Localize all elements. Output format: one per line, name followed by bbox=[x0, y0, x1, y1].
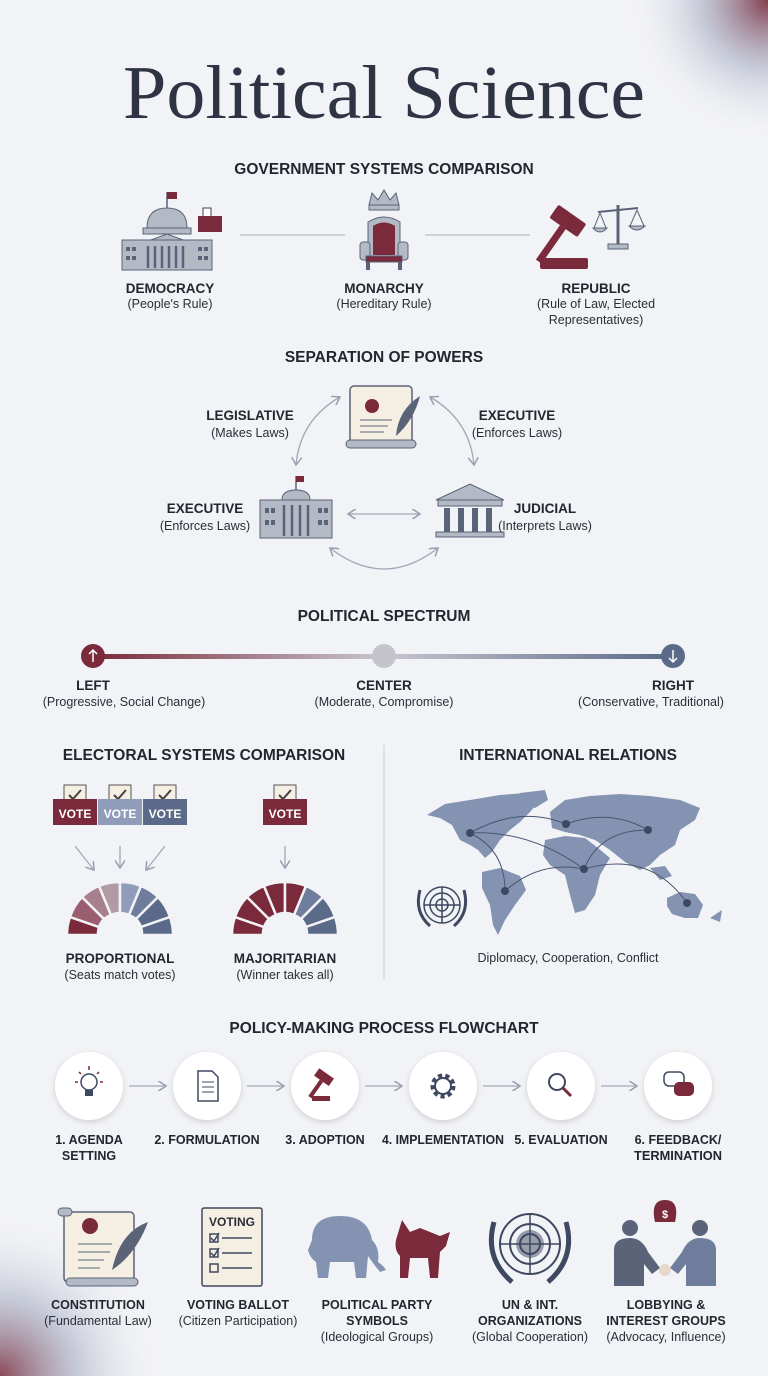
step 4: implementation: 4. IMPLEMENTATION bbox=[382, 1133, 504, 1147]
step 5: evaluation: 5. EVALUATION bbox=[514, 1133, 608, 1147]
step 4: implementation bbox=[382, 1052, 504, 1147]
icon: voting ballot bbox=[202, 1208, 262, 1286]
label: executive left bbox=[160, 501, 250, 533]
icon: scroll with quill bbox=[346, 386, 420, 448]
icon: vote boxes: VOTE bbox=[149, 807, 181, 821]
label: lobbying: INTEREST GROUPS bbox=[606, 1314, 726, 1328]
label: UN: ORGANIZATIONS bbox=[478, 1314, 582, 1328]
label: party symbols: (Ideological Groups) bbox=[321, 1330, 433, 1344]
heading: political spectrum: POLITICAL SPECTRUM bbox=[298, 608, 470, 625]
label: center bbox=[315, 678, 453, 709]
icon: republic gavel and scales bbox=[525, 205, 645, 272]
label: UN: (Global Cooperation) bbox=[472, 1330, 588, 1344]
step 1: agenda setting: 1. AGENDA bbox=[55, 1133, 123, 1147]
chart: spectrum line bbox=[81, 644, 685, 668]
label: executive top bbox=[472, 408, 562, 440]
label: executive top: EXECUTIVE bbox=[479, 408, 555, 423]
icon: party symbols bbox=[308, 1216, 450, 1278]
label: party symbols: SYMBOLS bbox=[346, 1314, 408, 1328]
chart: proportional hemicycle bbox=[67, 882, 173, 935]
label: constitution: CONSTITUTION bbox=[51, 1298, 145, 1312]
label: center: CENTER bbox=[356, 678, 412, 693]
label: UN bbox=[472, 1298, 588, 1344]
step 6: feedback bbox=[634, 1052, 722, 1163]
icon: UN emblem small bbox=[418, 887, 466, 926]
step 1: agenda setting bbox=[55, 1052, 123, 1163]
step 3: adoption: 3. ADOPTION bbox=[285, 1133, 365, 1147]
label: majoritarian bbox=[234, 951, 336, 982]
label: lobbying: (Advocacy, Influence) bbox=[606, 1330, 726, 1344]
label: democracy: DEMOCRACY bbox=[126, 281, 214, 296]
label: legislative: LEGISLATIVE bbox=[206, 408, 294, 423]
heading: electoral systems: ELECTORAL SYSTEMS COMPARISON bbox=[63, 747, 345, 764]
step 3: adoption bbox=[285, 1052, 365, 1147]
label: left bbox=[43, 678, 205, 709]
label: monarchy: (Hereditary Rule) bbox=[336, 297, 432, 311]
step 2: formulation bbox=[154, 1052, 260, 1147]
icon: lobbying handshake bbox=[614, 1200, 716, 1286]
label: republic: (Rule of Law, Elected bbox=[537, 297, 655, 311]
label: monarchy: MONARCHY bbox=[344, 281, 424, 296]
step 5: evaluation bbox=[514, 1052, 608, 1147]
step 1: agenda setting: SETTING bbox=[62, 1149, 116, 1163]
icon: lobbying handshake: $ bbox=[662, 1209, 668, 1221]
heading: international relations: INTERNATIONAL RELATIONS bbox=[459, 747, 677, 764]
icon: UN emblem bbox=[491, 1214, 569, 1282]
label: constitution: (Fundamental Law) bbox=[44, 1314, 152, 1328]
label: legislative bbox=[206, 408, 294, 440]
icon: voting ballot: VOTING bbox=[209, 1215, 255, 1229]
icon: judicial courthouse bbox=[436, 484, 504, 537]
heading: separation of powers: SEPARATION OF POWERS bbox=[285, 349, 483, 366]
icon: vote boxes bbox=[53, 785, 307, 870]
label: right: RIGHT bbox=[652, 678, 695, 693]
label: center: (Moderate, Compromise) bbox=[315, 695, 453, 709]
label: right bbox=[578, 678, 724, 709]
label: right: (Conservative, Traditional) bbox=[578, 695, 724, 709]
label: left: (Progressive, Social Change) bbox=[43, 695, 205, 709]
flowchart: arrows bbox=[129, 1085, 637, 1087]
heading: policy-making flowchart: POLICY-MAKING PROCESS FLOWCHART bbox=[229, 1020, 539, 1037]
label: proportional bbox=[64, 951, 176, 982]
label: left: LEFT bbox=[76, 678, 111, 693]
label: judicial bbox=[498, 501, 592, 533]
label: democracy: (People's Rule) bbox=[127, 297, 213, 311]
label: majoritarian: (Winner takes all) bbox=[236, 968, 334, 982]
label: lobbying: LOBBYING & bbox=[627, 1298, 705, 1312]
title: Political Science bbox=[123, 51, 645, 135]
label: constitution bbox=[44, 1298, 152, 1328]
label: proportional: PROPORTIONAL bbox=[66, 951, 174, 966]
label: executive left: (Enforces Laws) bbox=[160, 519, 250, 533]
label: international relations caption: Diplomacy, Cooperation, Conflict bbox=[477, 951, 659, 965]
label: party symbols: POLITICAL PARTY bbox=[322, 1298, 433, 1312]
label: republic bbox=[537, 281, 655, 327]
label: proportional: (Seats match votes) bbox=[64, 968, 176, 982]
label: judicial: JUDICIAL bbox=[514, 501, 576, 516]
label: executive top: (Enforces Laws) bbox=[472, 426, 562, 440]
step 6: feedback: TERMINATION bbox=[634, 1149, 722, 1163]
label: majoritarian: MAJORITARIAN bbox=[234, 951, 336, 966]
label: party symbols bbox=[321, 1298, 433, 1344]
label: monarchy bbox=[336, 281, 432, 311]
label: democracy bbox=[126, 281, 214, 311]
chart: world map bbox=[427, 790, 722, 935]
icon: constitution bbox=[58, 1208, 148, 1286]
label: republic: REPUBLIC bbox=[561, 281, 631, 296]
step 6: feedback: 6. FEEDBACK/ bbox=[635, 1133, 722, 1147]
label: executive left: EXECUTIVE bbox=[167, 501, 243, 516]
label: republic: Representatives) bbox=[549, 313, 643, 327]
label: voting ballot: VOTING BALLOT bbox=[187, 1298, 289, 1312]
step 2: formulation: 2. FORMULATION bbox=[154, 1133, 260, 1147]
icon: monarchy throne bbox=[360, 190, 408, 270]
label: voting ballot bbox=[179, 1298, 297, 1328]
icon: executive building bbox=[260, 476, 332, 538]
arrows: cycle bbox=[296, 397, 474, 569]
icon: vote boxes: VOTE bbox=[59, 807, 91, 821]
chart: majoritarian hemicycle bbox=[232, 882, 338, 935]
label: judicial: (Interprets Laws) bbox=[498, 519, 592, 533]
label: legislative: (Makes Laws) bbox=[211, 426, 289, 440]
label: lobbying bbox=[606, 1298, 726, 1344]
label: voting ballot: (Citizen Participation) bbox=[179, 1314, 297, 1328]
icon: democracy capitol bbox=[122, 192, 222, 270]
icon: vote boxes: VOTE bbox=[269, 807, 301, 821]
heading: government systems: GOVERNMENT SYSTEMS COMPARISON bbox=[234, 161, 534, 178]
icon: vote boxes: VOTE bbox=[104, 807, 136, 821]
label: UN: UN & INT. bbox=[502, 1298, 558, 1312]
